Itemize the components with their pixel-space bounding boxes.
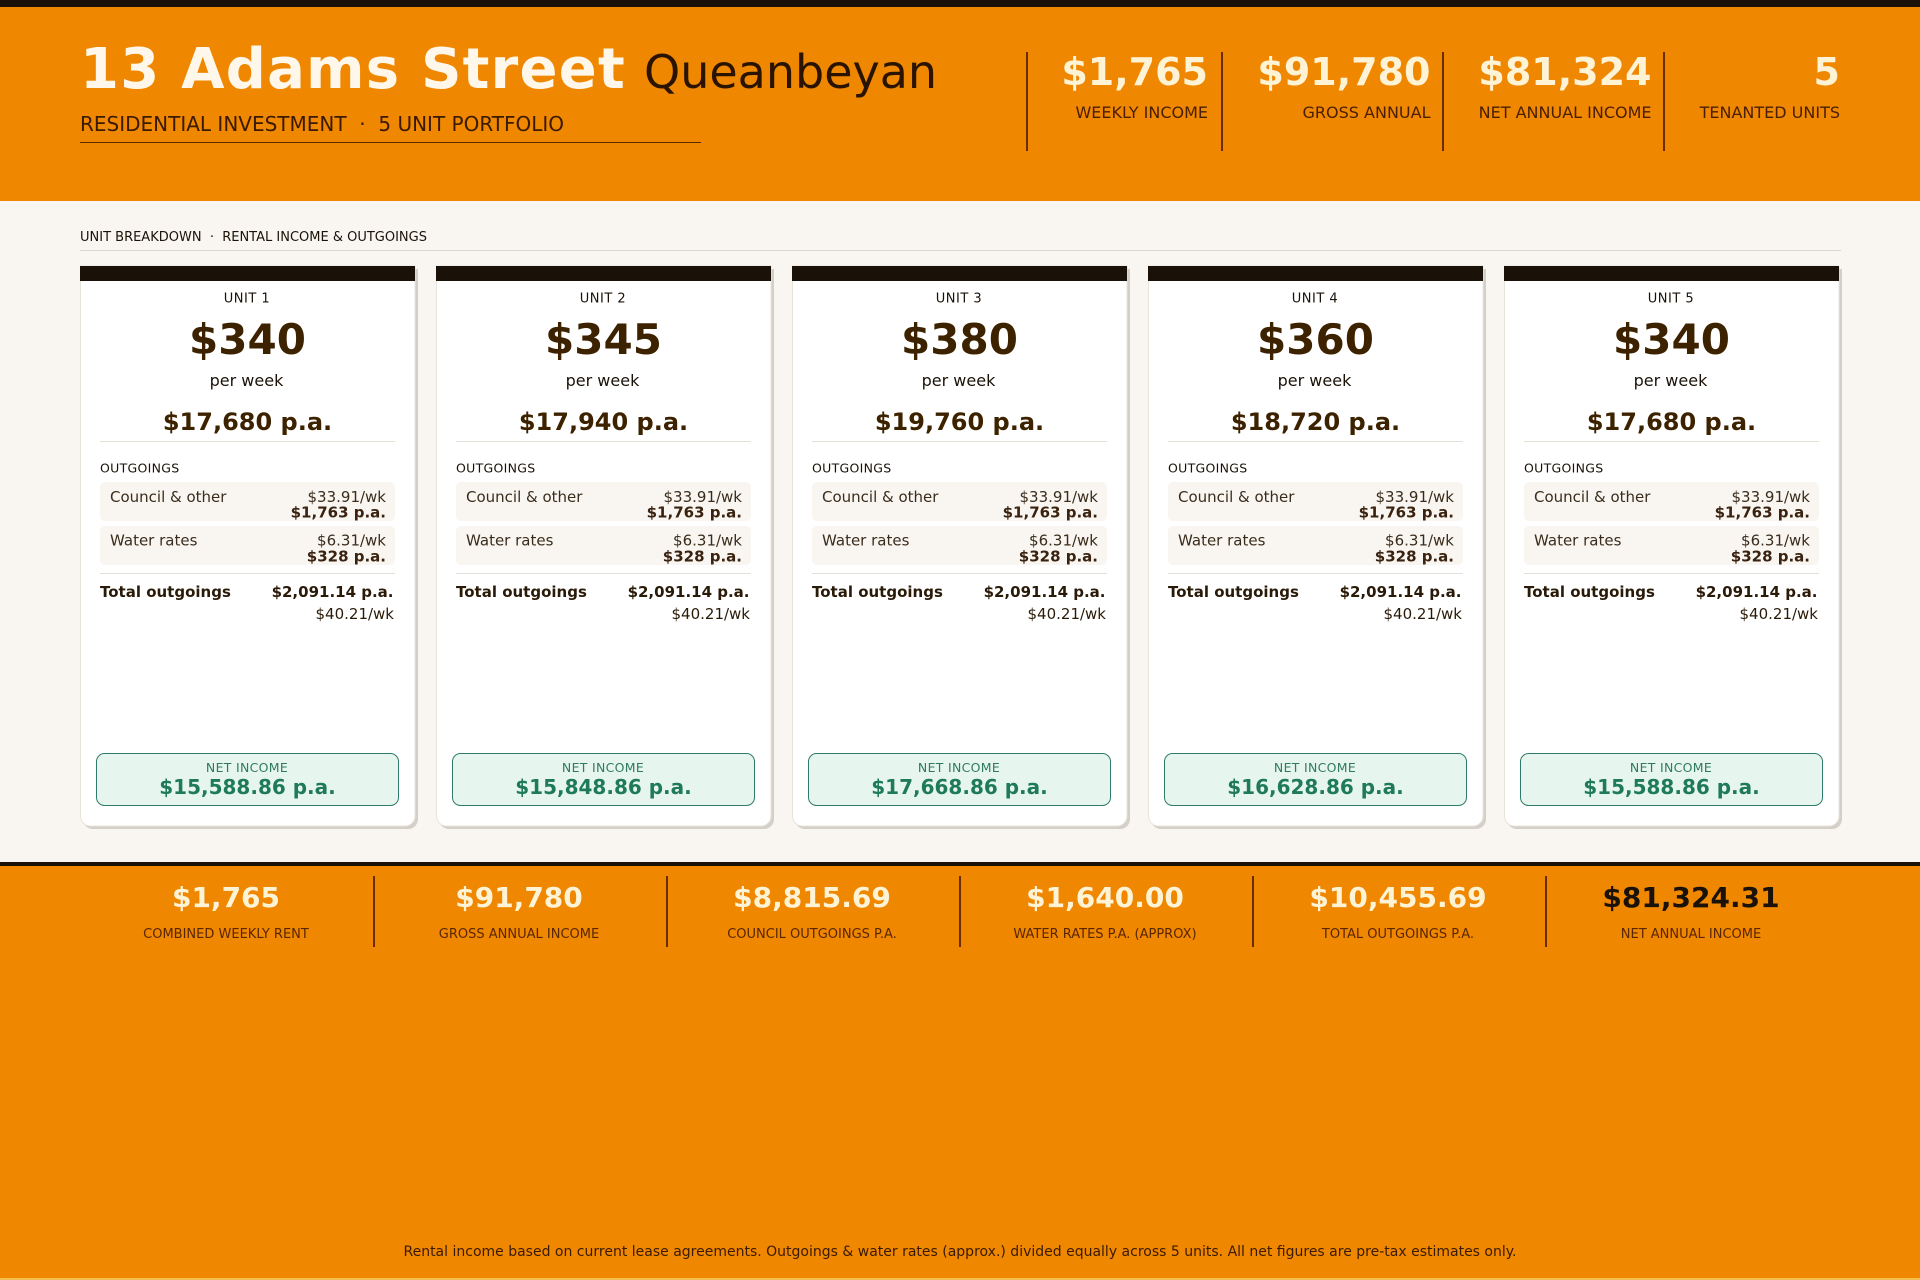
stat: weekly income: $1,765 (1061, 50, 1208, 94)
stat: gross annual (1221, 50, 1431, 151)
row: water (812, 526, 1107, 566)
card: unit 5: per week (1634, 371, 1708, 390)
stat: net annual income: $81,324 (1478, 50, 1652, 94)
card: unit 5: OUTGOINGS (1524, 460, 1604, 476)
total outgoings (456, 583, 750, 623)
total outgoings: Total outgoings (812, 583, 943, 601)
weekly rent: $360 (1257, 315, 1374, 364)
card: unit 3: UNIT 3 (936, 292, 982, 306)
row: water: $328 p.a. (1019, 548, 1098, 566)
subtitle: RESIDENTIAL INVESTMENT · 5 UNIT PORTFOLIO (80, 112, 564, 136)
row: council: Council & other (1534, 488, 1651, 506)
annual rent: $19,760 p.a. (875, 408, 1044, 436)
summary: council outgoings (727, 876, 961, 947)
summary: water rates (1013, 876, 1254, 947)
row: water: $6.31/wk (673, 532, 742, 550)
total outgoings: $2,091.14 p.a. (984, 583, 1106, 601)
title: 13 Adams Street (80, 37, 626, 102)
total outgoings: $40.21/wk (672, 605, 750, 623)
row: water: Water rates (822, 532, 910, 550)
row: council (812, 482, 1107, 522)
total outgoings: $40.21/wk (1028, 605, 1106, 623)
row: water: $328 p.a. (1375, 548, 1454, 566)
net income: $17,668.86 p.a. (871, 775, 1048, 799)
total outgoings (1524, 583, 1818, 623)
section heading: UNIT BREAKDOWN · RENTAL INCOME & OUTGOINGS (80, 230, 427, 245)
net income: $15,848.86 p.a. (515, 775, 692, 799)
summary: total outgoings (1309, 876, 1547, 947)
summary: gross annual income: $91,780 (455, 881, 583, 914)
card: unit 3: per week (922, 371, 996, 390)
card: unit 1: OUTGOINGS (100, 460, 180, 476)
summary band (0, 862, 1920, 1280)
summary: net annual income: NET ANNUAL INCOME (1621, 927, 1761, 942)
total outgoings (100, 583, 394, 623)
row: council: Council & other (822, 488, 939, 506)
net income: $15,588.86 p.a. (159, 775, 336, 799)
summary: gross annual income (439, 876, 668, 947)
card: unit 1: UNIT 1 (224, 292, 270, 306)
summary: gross annual income: GROSS ANNUAL INCOME (439, 927, 599, 942)
stat: net annual income (1442, 50, 1652, 151)
card: unit 2: per week (566, 371, 640, 390)
row: water: $6.31/wk (1741, 532, 1810, 550)
row: council (1168, 482, 1463, 522)
annual rent: $17,940 p.a. (519, 408, 688, 436)
net income: $16,628.86 p.a. (1227, 775, 1404, 799)
header band (0, 0, 1920, 201)
row: council: $1,763 p.a. (291, 504, 386, 522)
weekly rent: $340 (1613, 315, 1730, 364)
annual rent: $17,680 p.a. (1587, 408, 1756, 436)
net income (452, 754, 754, 806)
net income (808, 754, 1110, 806)
net income (1164, 754, 1466, 806)
total outgoings: Total outgoings (1168, 583, 1299, 601)
total outgoings: Total outgoings (1524, 583, 1655, 601)
stat: tenanted units: TENANTED UNITS (1699, 103, 1840, 122)
total outgoings: $2,091.14 p.a. (272, 583, 394, 601)
row: council: $1,763 p.a. (1003, 504, 1098, 522)
weekly rent: $380 (901, 315, 1018, 364)
stat: tenanted units: 5 (1814, 50, 1840, 94)
summary: net annual income (1602, 881, 1780, 942)
weekly rent: $345 (545, 315, 662, 364)
row: council (456, 482, 751, 522)
card: unit 2: UNIT 2 (580, 292, 626, 306)
row: council (1524, 482, 1819, 522)
row: council: $33.91/wk (1376, 488, 1454, 506)
net income: NET INCOME (918, 760, 1000, 775)
footnote: Rental income based on current lease agreements. Outgoings & water rates (approx.) divided equally across 5 units. All net figures are pre-tax estimates only. (403, 1244, 1517, 1260)
annual rent: $17,680 p.a. (163, 408, 332, 436)
summary: water rates: WATER RATES P.A. (APPROX) (1013, 927, 1197, 942)
total outgoings (1168, 583, 1462, 623)
row: council: $33.91/wk (1732, 488, 1810, 506)
stat: net annual income: NET ANNUAL INCOME (1479, 103, 1652, 122)
row: council: $33.91/wk (1020, 488, 1098, 506)
title (80, 37, 937, 102)
summary: combined weekly rent (143, 876, 375, 947)
summary: water rates: $1,640.00 (1026, 881, 1184, 914)
card: unit 3 (792, 266, 1130, 829)
net income: $15,588.86 p.a. (1583, 775, 1760, 799)
row: council: Council & other (466, 488, 583, 506)
card: unit 4: OUTGOINGS (1168, 460, 1248, 476)
summary: council outgoings: $8,815.69 (733, 881, 891, 914)
row: water (456, 526, 751, 566)
row: water (1524, 526, 1819, 566)
total outgoings: $40.21/wk (316, 605, 394, 623)
row: water: Water rates (1178, 532, 1266, 550)
card: unit 4: UNIT 4 (1292, 292, 1338, 306)
summary: combined weekly rent: COMBINED WEEKLY RENT (143, 927, 309, 942)
net income: NET INCOME (1274, 760, 1356, 775)
summary: council outgoings: COUNCIL OUTGOINGS P.A. (727, 927, 897, 942)
row: water: $6.31/wk (1385, 532, 1454, 550)
card: unit 2 (436, 266, 774, 829)
row: council: Council & other (110, 488, 227, 506)
weekly rent: $340 (189, 315, 306, 364)
row: council: Council & other (1178, 488, 1295, 506)
card: unit 2: OUTGOINGS (456, 460, 536, 476)
row: water: $328 p.a. (663, 548, 742, 566)
net income: NET INCOME (562, 760, 644, 775)
stat: tenanted units (1663, 50, 1840, 151)
row: water: Water rates (110, 532, 198, 550)
card: unit 3: OUTGOINGS (812, 460, 892, 476)
stat: gross annual: GROSS ANNUAL (1303, 103, 1431, 122)
total outgoings: $2,091.14 p.a. (1340, 583, 1462, 601)
summary: net annual income: $81,324.31 (1602, 881, 1780, 914)
row: council: $33.91/wk (664, 488, 742, 506)
stat: weekly income: WEEKLY INCOME (1075, 103, 1208, 122)
card: unit 1: per week (210, 371, 284, 390)
row: water: Water rates (466, 532, 554, 550)
row: water (1168, 526, 1463, 566)
card: unit 1 (80, 266, 418, 829)
stat: gross annual: $91,780 (1257, 50, 1430, 94)
row: council (100, 482, 395, 522)
card: unit 5 (1504, 266, 1842, 829)
row: council: $1,763 p.a. (1359, 504, 1454, 522)
row: water: Water rates (1534, 532, 1622, 550)
net income: NET INCOME (206, 760, 288, 775)
summary: total outgoings: TOTAL OUTGOINGS P.A. (1321, 927, 1474, 942)
total outgoings: $40.21/wk (1740, 605, 1818, 623)
title: Queanbeyan (644, 45, 937, 99)
row: water: $328 p.a. (307, 548, 386, 566)
net income: NET INCOME (1630, 760, 1712, 775)
row: water: $6.31/wk (317, 532, 386, 550)
row: council: $1,763 p.a. (647, 504, 742, 522)
annual rent: $18,720 p.a. (1231, 408, 1400, 436)
total outgoings: Total outgoings (456, 583, 587, 601)
row: council: $33.91/wk (308, 488, 386, 506)
total outgoings: $40.21/wk (1384, 605, 1462, 623)
row: water: $6.31/wk (1029, 532, 1098, 550)
stat: weekly income (1026, 50, 1208, 151)
card: unit 4: per week (1278, 371, 1352, 390)
card: unit 5: UNIT 5 (1648, 292, 1694, 306)
total outgoings: $2,091.14 p.a. (628, 583, 750, 601)
total outgoings (812, 583, 1106, 623)
total outgoings: Total outgoings (100, 583, 231, 601)
row: water: $328 p.a. (1731, 548, 1810, 566)
summary: total outgoings: $10,455.69 (1309, 881, 1487, 914)
net income (96, 754, 398, 806)
row: water (100, 526, 395, 566)
total outgoings: $2,091.14 p.a. (1696, 583, 1818, 601)
net income (1520, 754, 1822, 806)
summary: combined weekly rent: $1,765 (172, 881, 280, 914)
card: unit 4 (1148, 266, 1486, 829)
row: council: $1,763 p.a. (1715, 504, 1810, 522)
